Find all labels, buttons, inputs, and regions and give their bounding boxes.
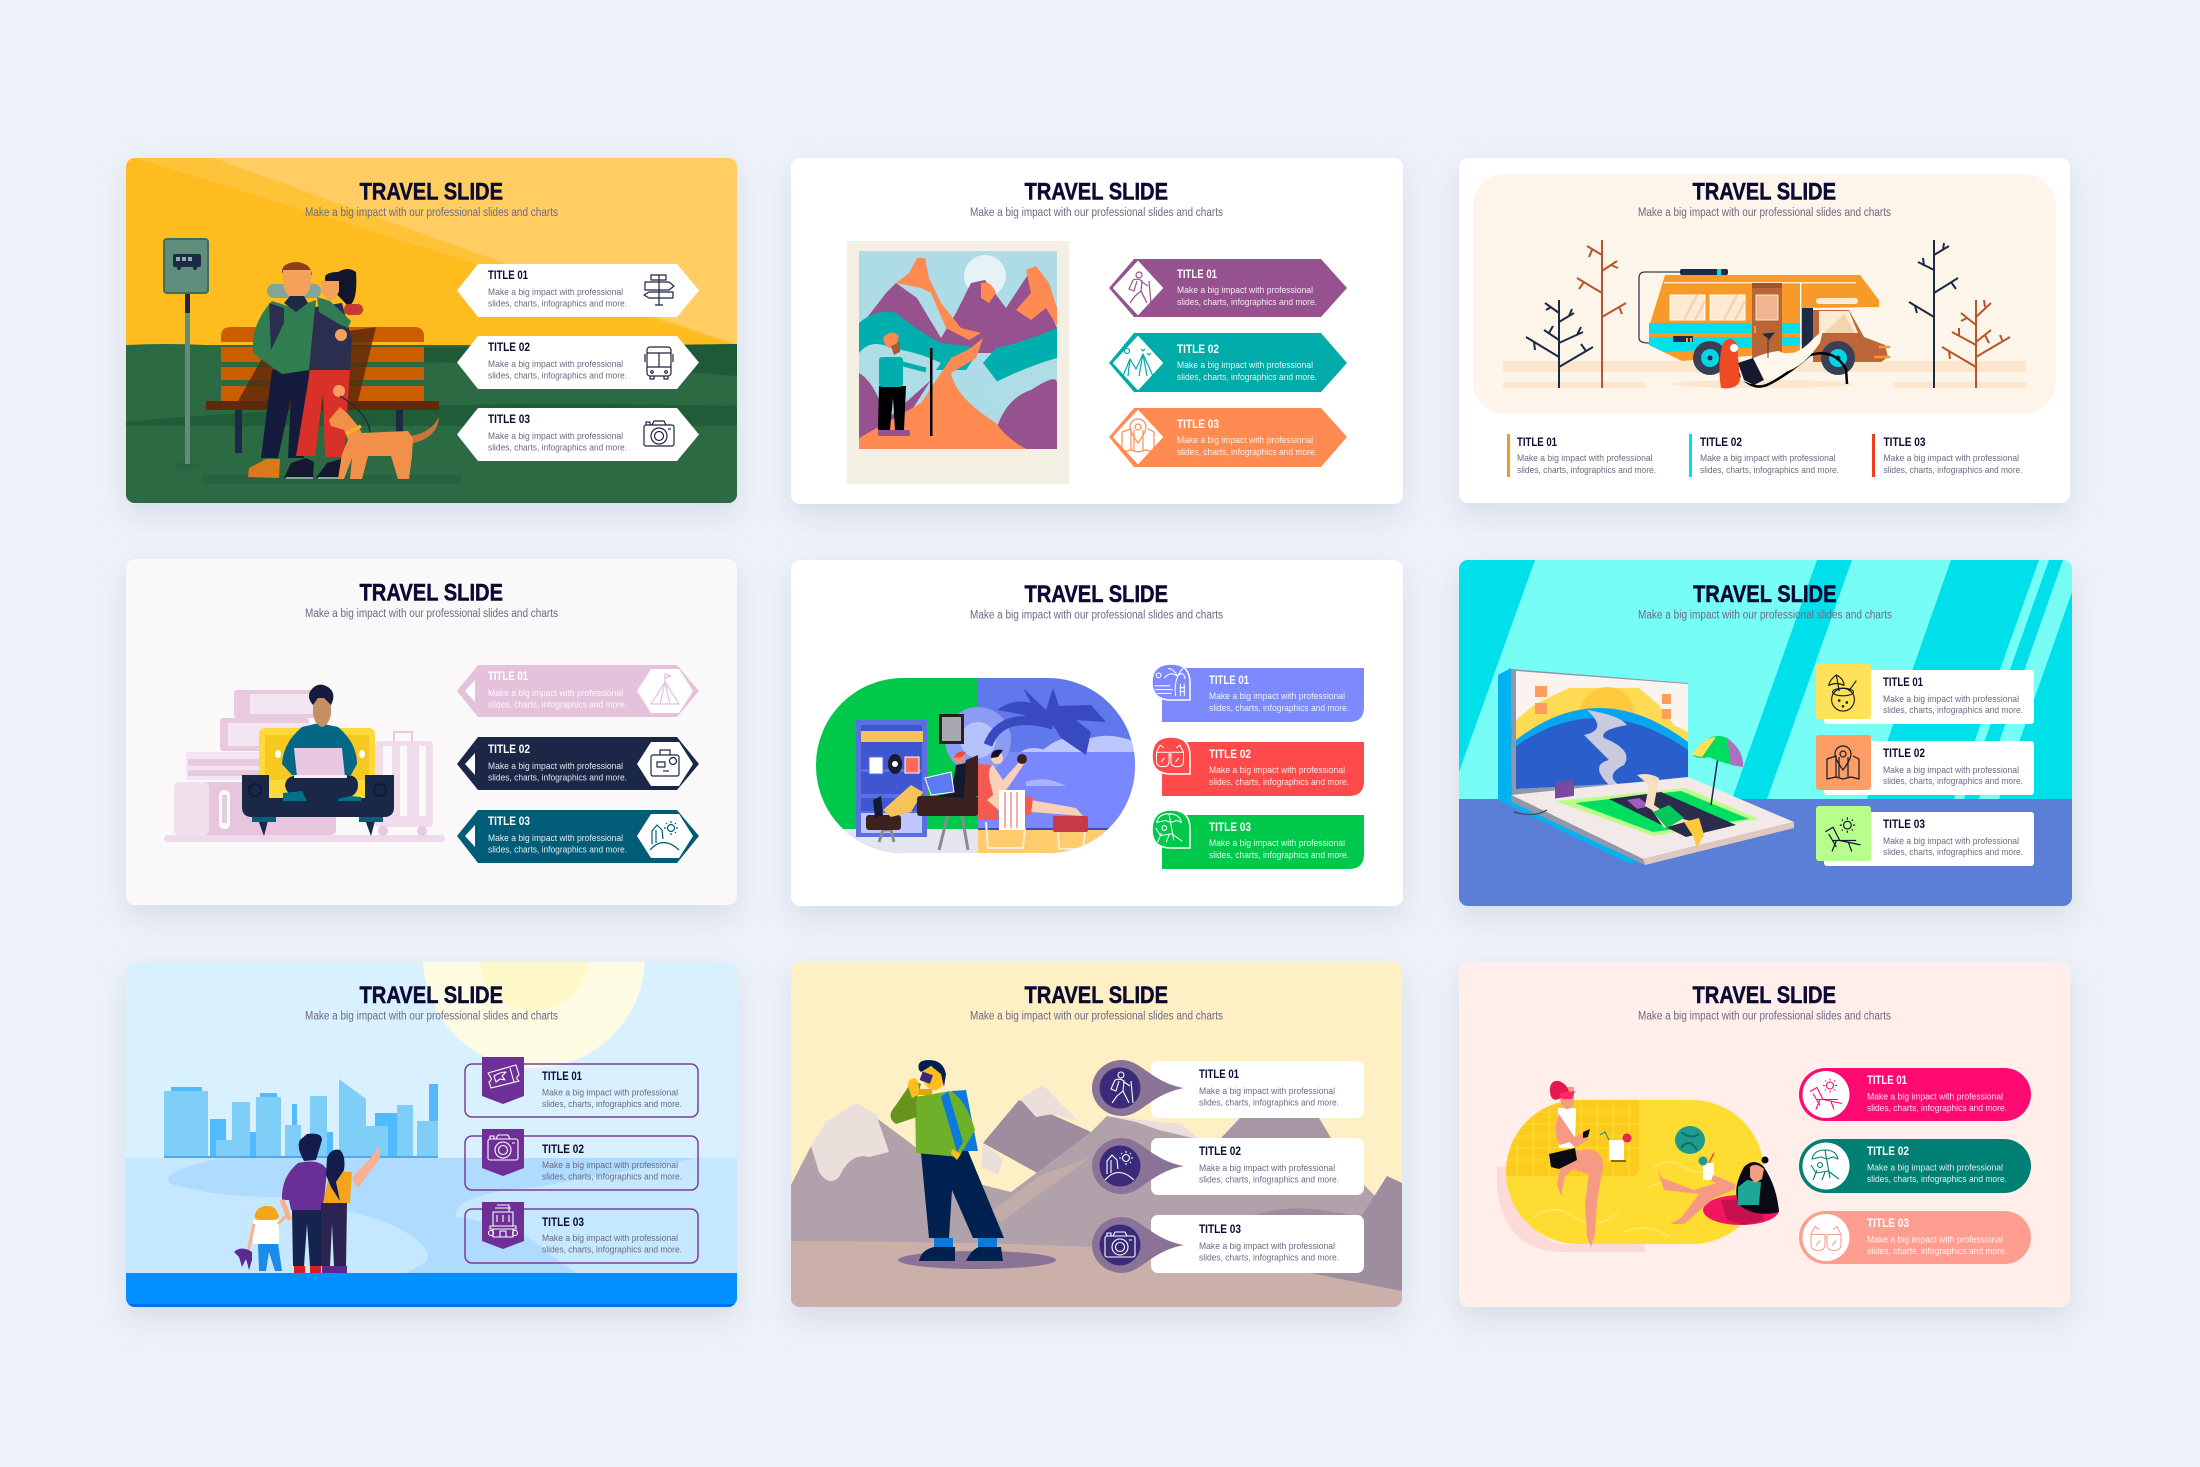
title 02 body text: Make a big impact with professional: [1867, 1162, 2003, 1172]
title 02 body text: slides, charts, infographics and more.: [488, 370, 627, 380]
title 02 body text: [1209, 765, 1349, 787]
slide 6 subtitle: Make a big impact with our professional slides and charts: [1638, 610, 1892, 622]
card: title 02 white bubble: [1092, 1138, 1364, 1195]
title 03 body text: [1883, 836, 2023, 857]
title 01 label: TITLE 01: [1209, 673, 1249, 687]
icon: hiker map pin: [1092, 1060, 1184, 1116]
title 02 body text: [1177, 360, 1317, 382]
title 03 body text: [1199, 1241, 1339, 1262]
icon: mountains in diamond: [1114, 337, 1162, 389]
title 02 body text: Make a big impact with professional: [1199, 1163, 1335, 1173]
illustration: split pill home and beach scene: [816, 678, 1136, 853]
title 01 body text: slides, charts, infographics and more.: [1177, 297, 1317, 307]
title 02 body text: Make a big impact with professional: [1177, 360, 1313, 370]
title 02 label: TITLE 02: [1177, 342, 1219, 356]
card: title 01 outline: [465, 1057, 698, 1117]
title 03 body text: Make a big impact with professional: [1199, 1241, 1335, 1251]
slide 4 background: [126, 559, 737, 905]
card: title 02 navy hexagon: [457, 737, 699, 790]
title 03 body text: Make a big impact with professional: [1209, 838, 1345, 848]
title 01 body text: Make a big impact with professional: [1209, 691, 1345, 701]
title 03 body text: Make a big impact with professional: [1867, 1234, 2003, 1244]
title 02 body text: [1700, 453, 1839, 475]
slide 6 title: TRAVEL SLIDE: [1693, 581, 1836, 608]
title 03 label: TITLE 03: [1884, 435, 1926, 449]
title 02 label: TITLE 02: [1883, 746, 1925, 760]
card: title 02 red: [1152, 737, 1364, 796]
icon: hiker in diamond: [1114, 262, 1162, 314]
illustration: camper van: [1639, 269, 1890, 375]
title 02 body text: [542, 1160, 682, 1182]
title 01 body text: Make a big impact with professional: [1517, 453, 1652, 463]
title 02 body text: slides, charts, infographics and more.: [1700, 465, 1839, 475]
icon: coconut drink tile: [1816, 664, 1871, 719]
title 02 label: TITLE 02: [488, 742, 530, 756]
title 03 body text: slides, charts, infographics and more.: [1883, 847, 2023, 857]
title 02 body text: Make a big impact with professional: [542, 1160, 678, 1170]
icon: sunglasses circle: [1802, 1214, 1850, 1261]
card: title 02 outline: [465, 1129, 698, 1190]
title 01 body text: slides, charts, infographics and more.: [1867, 1103, 2007, 1113]
card: title 02 teal pill: [1799, 1139, 2031, 1193]
card: title 03: [1816, 806, 2034, 866]
title 02 label: TITLE 02: [1209, 747, 1251, 761]
icon: lounge chair tile: [1816, 806, 1871, 861]
icon: tent in white hexagon: [637, 669, 693, 713]
title 01 body text: Make a big impact with professional: [1199, 1086, 1335, 1096]
feature: title 02: [1689, 434, 1839, 477]
title 01 body text: slides, charts, infographics and more.: [1517, 465, 1656, 475]
slide 1 subtitle: Make a big impact with our professional slides and charts: [305, 207, 558, 219]
title 01 label: TITLE 01: [1199, 1067, 1239, 1081]
title 01 body text: Make a big impact with professional: [488, 688, 623, 698]
card: title 01 periwinkle: [1152, 664, 1364, 722]
title 02 body text: [488, 761, 627, 782]
icon: map pin tile: [1816, 735, 1871, 790]
illustration: bare trees: [1526, 240, 2010, 388]
icon: ticket tag: [482, 1057, 524, 1104]
illustration: navy sofa with yellow cushions: [242, 728, 394, 836]
illustration: city skyline: [164, 1079, 438, 1158]
illustration: hiker in mountains poster: [859, 251, 1057, 449]
title 02 body text: slides, charts, infographics and more.: [488, 772, 627, 782]
card: title 03 green: [1152, 810, 1364, 869]
slide 9 background: [1459, 962, 2070, 1307]
title 03 body text: [542, 1233, 682, 1254]
illustration: man with laptop: [282, 685, 361, 801]
title 01 label: TITLE 01: [1883, 675, 1923, 689]
title 03 label: TITLE 03: [1883, 817, 1925, 831]
slide 6 background: [1459, 560, 2072, 906]
panel: slide 8 photographer in mountains: [791, 962, 1402, 1320]
title 03 body text: [1884, 453, 2022, 475]
title 02 body text: [1867, 1162, 2007, 1184]
icon: bus: [645, 347, 673, 379]
title 01 body text: slides, charts, infographics and more.: [542, 1099, 682, 1109]
slide 3 subtitle: Make a big impact with our professional slides and charts: [1638, 207, 1891, 219]
slide 1 background: [126, 158, 737, 503]
panel: slide 9 pool party: [1459, 962, 2070, 1319]
slide 8 subtitle: Make a big impact with our professional slides and charts: [970, 1010, 1223, 1022]
title 01 body text: slides, charts, infographics and more.: [1883, 705, 2023, 715]
title 02 body text: slides, charts, infographics and more.: [1177, 372, 1317, 382]
title 02 body text: slides, charts, infographics and more.: [1199, 1174, 1339, 1184]
title 02 body text: [488, 359, 627, 380]
card: title 02 hexagon: [457, 336, 699, 389]
title 02 body text: slides, charts, infographics and more.: [1883, 776, 2023, 786]
title 02 body text: [1199, 1163, 1339, 1184]
title 03 label: TITLE 03: [1177, 417, 1219, 431]
panel: slide 6 laptop beach: [1459, 560, 2072, 918]
illustration: ground stripes: [1503, 361, 2026, 388]
icon: beach umbrella circle: [1802, 1142, 1850, 1190]
title 02 label: TITLE 02: [542, 1142, 584, 1156]
icon: hotel tag: [482, 1202, 524, 1249]
slide 7 subtitle: Make a big impact with our professional slides and charts: [305, 1010, 558, 1022]
title 03 body text: Make a big impact with professional: [542, 1233, 678, 1243]
illustration: family pointing at city: [234, 1134, 380, 1273]
title 02 body text: slides, charts, infographics and more.: [1209, 777, 1349, 787]
card: title 02 teal banner: [1109, 333, 1347, 392]
title 02 label: TITLE 02: [1199, 1144, 1241, 1158]
icon: signpost: [644, 275, 674, 305]
slide 8 background with mountains: [791, 962, 1402, 1308]
title 02 body text: Make a big impact with professional: [1883, 765, 2019, 775]
cream rounded scene backdrop: [1473, 174, 2056, 414]
card: title 03 hexagon: [457, 408, 699, 461]
title 03 body text: slides, charts, infographics and more.: [1199, 1252, 1339, 1262]
title 01 label: TITLE 01: [542, 1069, 582, 1083]
title 03 body text: slides, charts, infographics and more.: [1209, 850, 1349, 860]
title 02 body text: Make a big impact with professional: [488, 761, 623, 771]
title 02 body text: Make a big impact with professional: [488, 359, 623, 369]
title 03 body text: slides, charts, infographics and more.: [1884, 465, 2022, 475]
title 01 label: TITLE 01: [488, 268, 528, 282]
card: title 01 purple banner: [1109, 259, 1347, 317]
icon: sunglasses tab: [1152, 737, 1190, 774]
poster frame: [847, 241, 1069, 484]
illustration: hiking couple: [248, 262, 363, 478]
title 01 body text: [542, 1088, 682, 1109]
slide 5 subtitle: Make a big impact with our professional slides and charts: [970, 610, 1223, 622]
illustration: dog on leash: [329, 396, 439, 479]
title 02 body text: slides, charts, infographics and more.: [542, 1172, 682, 1182]
title 03 label: TITLE 03: [488, 814, 530, 828]
title 01 body text: [1867, 1092, 2007, 1113]
illustration: wooden bench: [206, 327, 439, 453]
title 02 body text: Make a big impact with professional: [1700, 453, 1836, 463]
panel: slide 7 family city skyline: [120, 962, 743, 1325]
panel: slide 4 man on sofa with laptop: [126, 559, 737, 917]
feature: title 03: [1872, 434, 2022, 477]
title 01 body text: slides, charts, infographics and more.: [1199, 1098, 1339, 1108]
card: title 01 pink pill: [1799, 1068, 2031, 1121]
slide 8 title: TRAVEL SLIDE: [1024, 982, 1168, 1009]
title 03 body text: Make a big impact with professional: [1884, 453, 2019, 463]
slide 3 background: [1459, 158, 2070, 503]
title 01 label: TITLE 01: [1517, 435, 1557, 449]
title 03 label: TITLE 03: [1209, 820, 1251, 834]
icon: beach umbrella tab: [1152, 810, 1190, 848]
slide 2 title: TRAVEL SLIDE: [1024, 178, 1168, 206]
card: title 03 outline: [465, 1202, 698, 1263]
title 01 body text: [1199, 1086, 1339, 1108]
icon: map pin in diamond: [1114, 411, 1162, 463]
title 01 body text: slides, charts, infographics and more.: [488, 298, 627, 308]
title 03 body text: [488, 833, 627, 854]
title 01 label: TITLE 01: [1177, 267, 1217, 281]
feature: title 01: [1507, 434, 1656, 477]
slide 7 background: [126, 962, 737, 1307]
title 01 body text: Make a big impact with professional: [1867, 1092, 2003, 1102]
icon: landscape map pin: [1092, 1138, 1184, 1194]
card: title 03 salmon pill: [1799, 1211, 2031, 1264]
title 01 body text: [1517, 453, 1656, 475]
title 01 body text: [488, 688, 627, 710]
title 03 body text: Make a big impact with professional: [488, 833, 623, 843]
title 02 body text: Make a big impact with professional: [1209, 765, 1345, 775]
title 03 body text: Make a big impact with professional: [1177, 435, 1313, 445]
title 02 label: TITLE 02: [488, 340, 530, 354]
title 01 body text: slides, charts, infographics and more.: [488, 700, 627, 710]
title 01 body text: [1177, 285, 1317, 307]
title 03 label: TITLE 03: [542, 1215, 584, 1229]
slide 7 title: TRAVEL SLIDE: [360, 982, 503, 1009]
title 03 body text: Make a big impact with professional: [488, 431, 623, 441]
illustration: yellow pool with two women: [1497, 1081, 1779, 1252]
title 03 label: TITLE 03: [1867, 1216, 1909, 1230]
slide 9 subtitle: Make a big impact with our professional slides and charts: [1638, 1010, 1891, 1022]
panel: slide 1 yellow sunset bus stop: [126, 158, 737, 515]
title 01 label: TITLE 01: [488, 669, 528, 683]
title 03 body text: Make a big impact with professional: [1883, 836, 2019, 846]
title 03 body text: [1867, 1234, 2007, 1256]
title 01 body text: Make a big impact with professional: [542, 1088, 678, 1098]
title 03 body text: slides, charts, infographics and more.: [1177, 447, 1317, 457]
icon: camera tag: [482, 1129, 524, 1176]
title 03 body text: [488, 431, 627, 452]
title 03 body text: [1209, 838, 1349, 860]
slide 5 background: [791, 560, 1403, 906]
icon: beach palm tab: [1152, 664, 1190, 700]
title 02 body text: slides, charts, infographics and more.: [1867, 1174, 2007, 1184]
illustration: bus stop sign: [164, 239, 208, 464]
title 03 label: TITLE 03: [1199, 1222, 1241, 1236]
slide 4 title: TRAVEL SLIDE: [360, 580, 503, 606]
title 01 body text: [1209, 691, 1349, 713]
card: title 01: [1816, 664, 2034, 724]
slide 4 subtitle: Make a big impact with our professional slides and charts: [305, 608, 558, 620]
card: title 03 white bubble: [1092, 1215, 1364, 1273]
slide 3 title: TRAVEL SLIDE: [1692, 178, 1836, 206]
card: title 01 hexagon: [457, 264, 699, 317]
title 01 body text: [488, 287, 627, 308]
panel: slide 5 home versus beach: [791, 560, 1403, 918]
icon: suitcase in white hexagon: [637, 742, 693, 786]
slide 2 subtitle: Make a big impact with our professional slides and charts: [970, 207, 1223, 219]
card: title 03 teal hexagon: [457, 810, 699, 863]
panel: slide 2 mountain poster: [791, 158, 1403, 516]
card: title 02: [1816, 735, 2034, 795]
illustration: photographer with backpack: [890, 1060, 1056, 1269]
title 03 label: TITLE 03: [488, 412, 530, 426]
icon: camera map pin: [1092, 1217, 1184, 1273]
slide 5 title: TRAVEL SLIDE: [1024, 581, 1168, 608]
slide 2 background: [791, 158, 1403, 504]
title 02 body text: [1883, 765, 2023, 786]
illustration: reclining woman with cocktail: [1719, 330, 1847, 388]
title 03 body text: slides, charts, infographics and more.: [488, 844, 627, 854]
title 02 label: TITLE 02: [1700, 435, 1742, 449]
title 03 body text: slides, charts, infographics and more.: [488, 442, 627, 452]
slide 1 title: TRAVEL SLIDE: [360, 178, 503, 206]
title 01 body text: Make a big impact with professional: [1177, 285, 1313, 295]
title 03 body text: slides, charts, infographics and more.: [542, 1244, 682, 1254]
illustration: luggage and books: [164, 690, 445, 842]
title 02 label: TITLE 02: [1867, 1144, 1909, 1158]
card: title 01 white bubble: [1092, 1060, 1364, 1118]
title 03 body text: slides, charts, infographics and more.: [1867, 1246, 2007, 1256]
panel: slide 3 camper van: [1459, 158, 2070, 515]
title 01 body text: Make a big impact with professional: [488, 287, 623, 297]
card: title 01 pale pink hexagon: [457, 665, 699, 717]
icon: camera: [644, 421, 674, 446]
icon: lounge chair circle: [1802, 1071, 1850, 1118]
card: title 03 orange banner: [1109, 408, 1347, 467]
title 01 body text: Make a big impact with professional: [1883, 694, 2019, 704]
title 01 body text: [1883, 694, 2023, 715]
illustration: laptop with beach scene: [1498, 668, 1794, 865]
title 03 body text: [1177, 435, 1317, 457]
title 01 body text: slides, charts, infographics and more.: [1209, 703, 1349, 713]
icon: tree landscape in white hexagon: [637, 814, 693, 858]
slide 9 title: TRAVEL SLIDE: [1692, 982, 1836, 1009]
title 01 label: TITLE 01: [1867, 1073, 1907, 1087]
